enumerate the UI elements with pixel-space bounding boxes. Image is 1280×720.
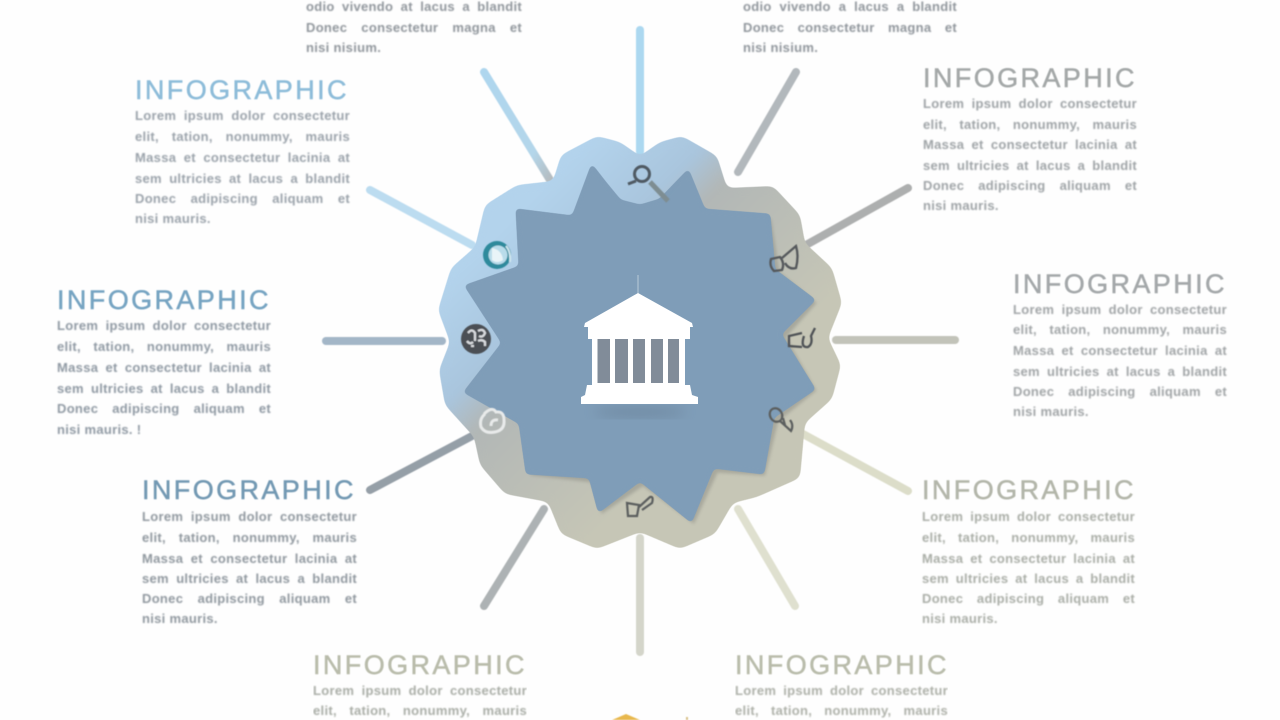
ray: lower right <box>738 509 795 606</box>
ray: right upper <box>806 188 908 245</box>
icon: loop <box>767 406 792 431</box>
ray: left <box>326 337 442 345</box>
colonnade <box>592 338 685 385</box>
column gaps <box>598 339 679 383</box>
ray: upper right <box>738 72 796 172</box>
rays around the emblem <box>326 30 955 652</box>
spire <box>637 275 639 294</box>
entablature <box>588 327 690 339</box>
ray: left lower <box>370 436 472 490</box>
icon: pale swirl <box>480 409 504 432</box>
heading: INFOGRAPHIC <box>1013 269 1227 299</box>
text block: bottom left (cut off) <box>313 651 527 718</box>
inner star <box>465 166 814 521</box>
bottom yellow emblem peek <box>612 714 688 720</box>
ray: left upper <box>370 190 472 245</box>
heading: INFOGRAPHIC <box>142 475 356 505</box>
text block: bottom right (cut off) <box>735 651 948 718</box>
ray: top <box>636 30 644 152</box>
text block: middle right <box>1012 269 1228 419</box>
steps <box>581 385 698 404</box>
heading: INFOGRAPHIC <box>923 63 1137 93</box>
ray: lower left <box>484 509 544 606</box>
outer wavy badge <box>438 136 842 549</box>
icon: magnifier <box>628 166 668 201</box>
center shading on star <box>594 406 686 418</box>
pediment <box>584 293 693 327</box>
text block: lower left <box>142 475 358 626</box>
icon: teal globe <box>483 241 511 269</box>
ray: upper left <box>484 72 550 180</box>
text block: upper right <box>922 63 1138 213</box>
text block: top left (cut off) <box>306 0 522 55</box>
icon: tools <box>789 328 815 347</box>
text block: upper left <box>134 75 350 226</box>
ray: bottom <box>636 538 644 652</box>
text block: lower right <box>922 475 1136 626</box>
heading: INFOGRAPHIC <box>57 285 271 315</box>
text block: middle left <box>56 285 272 437</box>
ray: right <box>836 336 955 344</box>
icon: classical bank building <box>581 275 698 404</box>
text block: top right (cut off) <box>742 0 958 55</box>
inner ring shading <box>472 172 813 520</box>
heading: INFOGRAPHIC <box>135 75 349 105</box>
heading: INFOGRAPHIC <box>922 475 1136 505</box>
icon: glasses <box>770 246 798 271</box>
icon: dark brain <box>461 324 491 354</box>
ray: right lower <box>803 434 908 491</box>
icon: link <box>627 497 653 516</box>
